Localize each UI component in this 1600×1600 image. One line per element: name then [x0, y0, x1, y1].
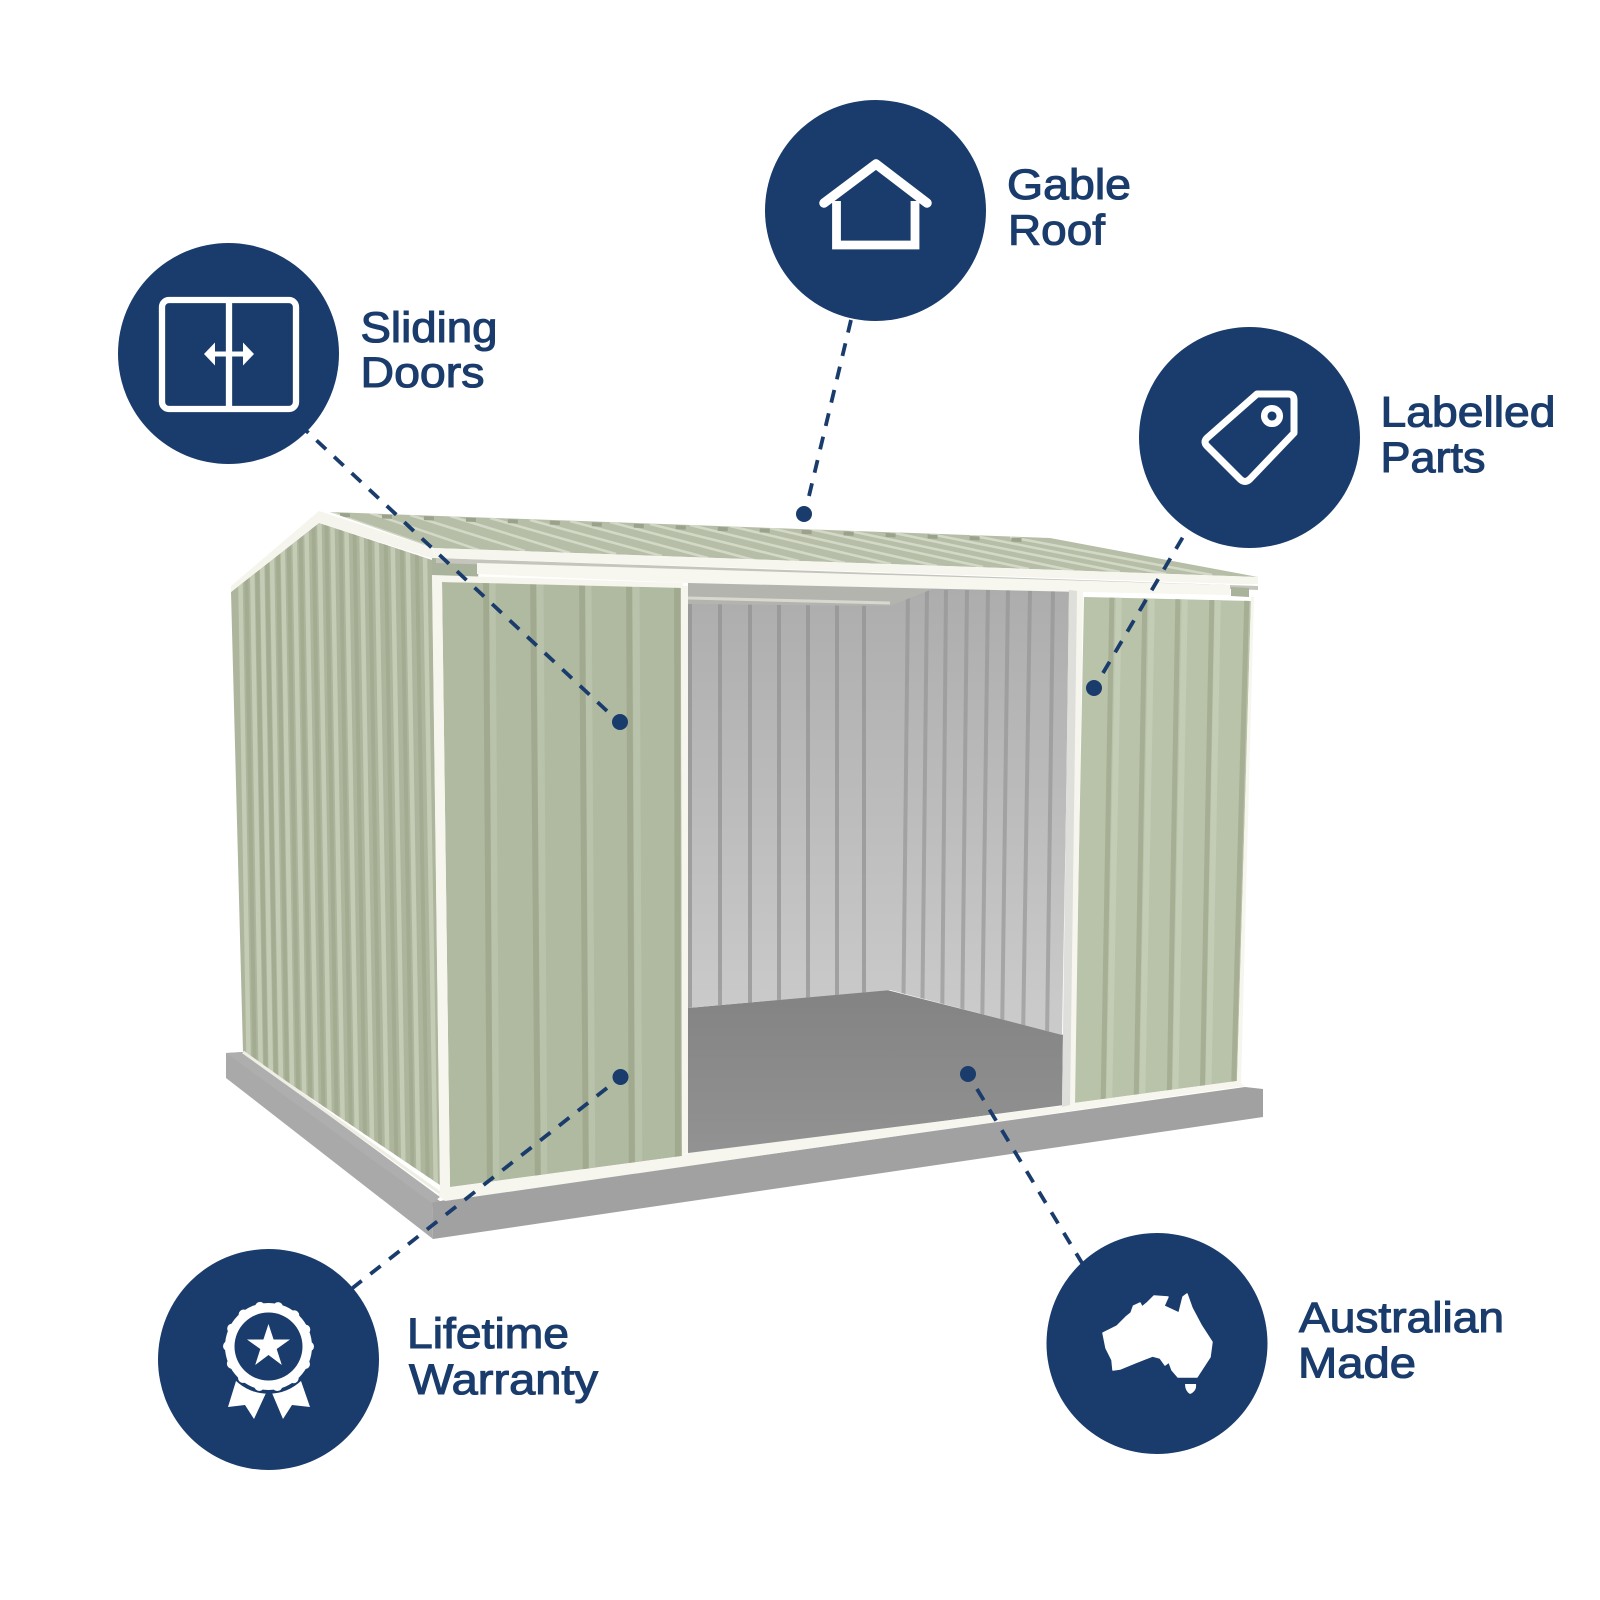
interior floor — [688, 990, 1064, 1155]
icon: australia map — [1046, 1233, 1268, 1454]
right door panel — [1074, 590, 1251, 1110]
icon: sliding door — [118, 243, 339, 464]
label: Labelled Parts: Parts — [1380, 434, 1486, 482]
icon: tag — [1139, 327, 1360, 548]
interior ceiling band — [688, 580, 940, 606]
label: Sliding Doors: Sliding — [360, 304, 498, 352]
label: Lifetime Warranty — [407, 1310, 599, 1404]
label: Sliding Doors — [360, 304, 498, 397]
label: Labelled Parts — [1380, 388, 1556, 482]
icon: rosette ribbon — [158, 1249, 379, 1470]
interior side wall — [890, 588, 1070, 1040]
label: Labelled Parts: Labelled — [1380, 388, 1556, 436]
gable end trim — [231, 511, 437, 592]
interior back wall — [688, 590, 891, 1010]
feature: australian made — [1046, 1233, 1504, 1454]
label: Lifetime Warranty: Lifetime — [407, 1310, 569, 1358]
feature: labelled parts — [1139, 327, 1556, 548]
feature: lifetime warranty — [158, 1249, 599, 1470]
label: Australian Made: Made — [1298, 1340, 1416, 1388]
label: Lifetime Warranty: Warranty — [409, 1356, 599, 1404]
left door panel — [442, 570, 682, 1200]
side wall with ribs — [231, 500, 440, 1200]
small wall block at right — [1231, 587, 1249, 597]
leader: australian made — [960, 1066, 1085, 1268]
feature: gable roof — [765, 100, 1131, 321]
shed illustration — [226, 500, 1263, 1239]
roof eave strip — [433, 548, 1258, 590]
door header — [477, 563, 1230, 595]
label: Gable Roof: Roof — [1008, 206, 1106, 254]
leader: gable roof — [796, 320, 851, 522]
roof panel — [330, 512, 1258, 577]
feature: sliding doors — [118, 243, 498, 464]
leader: sliding doors — [300, 425, 628, 730]
label: Gable Roof — [1007, 161, 1131, 254]
leader: labelled parts — [1086, 525, 1190, 696]
label: Australian Made — [1298, 1294, 1504, 1388]
leader: lifetime warranty — [350, 1069, 628, 1290]
icon: house — [765, 100, 986, 321]
block under eave — [432, 558, 480, 577]
white door frame — [432, 575, 1254, 1201]
label: Australian Made: Australian — [1299, 1294, 1504, 1342]
label: Gable Roof: Gable — [1007, 161, 1131, 209]
label: Sliding Doors: Doors — [360, 349, 484, 397]
concrete slab — [226, 1052, 1263, 1239]
